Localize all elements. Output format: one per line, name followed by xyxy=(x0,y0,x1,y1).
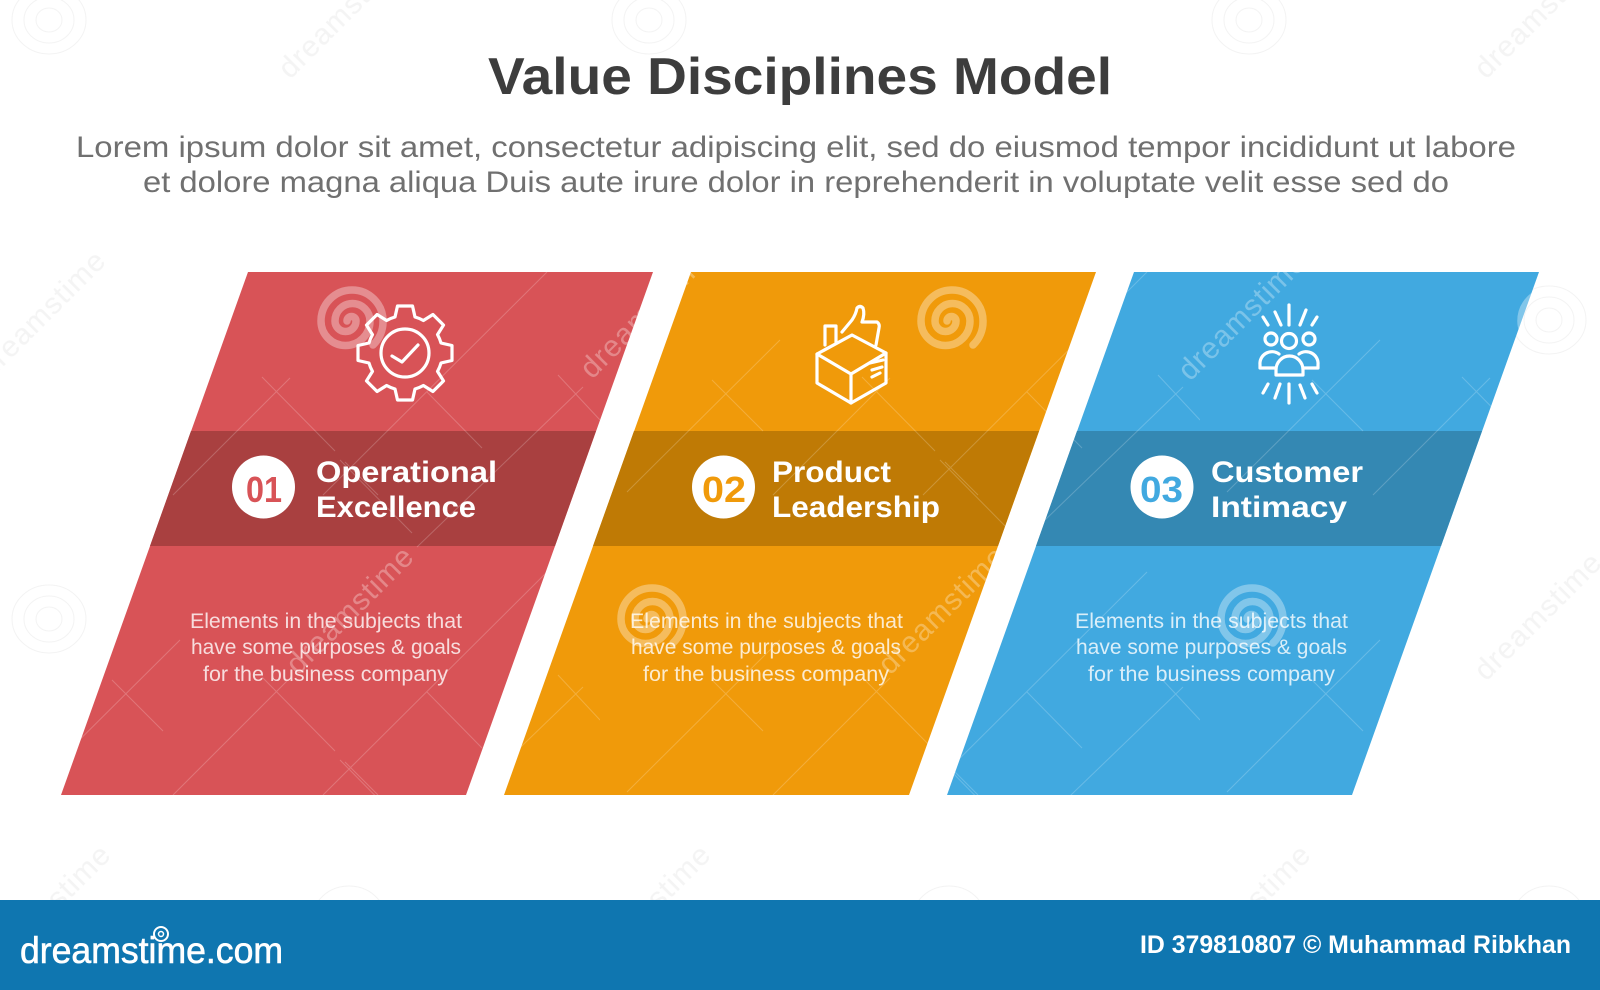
description text: have some purposes & goals xyxy=(631,636,901,659)
number badge 01 xyxy=(232,456,295,518)
description text: have some purposes & goals xyxy=(191,636,461,659)
icon: box with thumbs up xyxy=(817,306,886,403)
description text xyxy=(1075,610,1348,686)
heading: product leadership: Product xyxy=(772,456,891,489)
description text: for the business company xyxy=(1088,663,1336,686)
footer bar xyxy=(0,900,1600,990)
description text: have some purposes & goals xyxy=(1076,636,1347,659)
heading: product leadership xyxy=(772,456,940,524)
title: Value Disciplines Model xyxy=(488,48,1112,106)
panel: product leadership xyxy=(504,272,1096,795)
watermark overlay on panels xyxy=(81,272,1532,795)
description text: Elements in the subjects that xyxy=(1075,610,1348,633)
description text: Elements in the subjects that xyxy=(630,610,903,633)
number badge 03 xyxy=(1130,456,1194,518)
heading: customer intimacy xyxy=(1211,456,1363,524)
heading: customer intimacy: Intimacy xyxy=(1211,491,1347,524)
number badge 02: 02 xyxy=(702,469,746,510)
text: dreamstime xyxy=(577,838,718,979)
description text: for the business company xyxy=(203,663,449,686)
panel: customer intimacy xyxy=(947,272,1539,795)
watermark overlay on panels: dreamstime xyxy=(872,540,1013,681)
watermark overlay on panels: dreamstime xyxy=(574,244,715,385)
footer credit: ID 379810807 © Muhammad Ribkhan xyxy=(1140,931,1571,959)
number badge 02 xyxy=(692,456,755,518)
icon: gear with check xyxy=(358,306,452,400)
description text xyxy=(630,610,903,686)
heading: operational excellence xyxy=(316,456,497,524)
panel: operational excellence xyxy=(61,272,653,795)
watermark overlay on panels: dreamstime xyxy=(1172,246,1313,387)
text: dreamstime xyxy=(1177,838,1318,979)
subtitle text: Lorem ipsum dolor sit amet, consectetur adipiscing elit, sed do eiusmod tempor incididunt ut labore xyxy=(76,131,1516,164)
heading: operational excellence: Operational xyxy=(316,456,497,489)
footer logo: dreamstime.com: dreamstime.com xyxy=(20,930,283,971)
description text: for the business company xyxy=(643,663,890,686)
icon: customer group with rays xyxy=(1260,305,1318,403)
heading: product leadership: Leadership xyxy=(772,491,940,524)
subtitle text xyxy=(76,131,1516,199)
heading: customer intimacy: Customer xyxy=(1211,456,1363,489)
number badge 03: 03 xyxy=(1140,469,1183,510)
description text: Elements in the subjects that xyxy=(190,610,462,633)
description text xyxy=(190,610,462,686)
subtitle text: et dolore magna aliqua Duis aute irure dolor in reprehenderit in voluptate velit esse sed do xyxy=(143,166,1449,199)
number badge 01: 01 xyxy=(246,469,282,510)
watermark overlay on panels: dreamstime xyxy=(280,540,421,681)
heading: operational excellence: Excellence xyxy=(316,491,476,524)
